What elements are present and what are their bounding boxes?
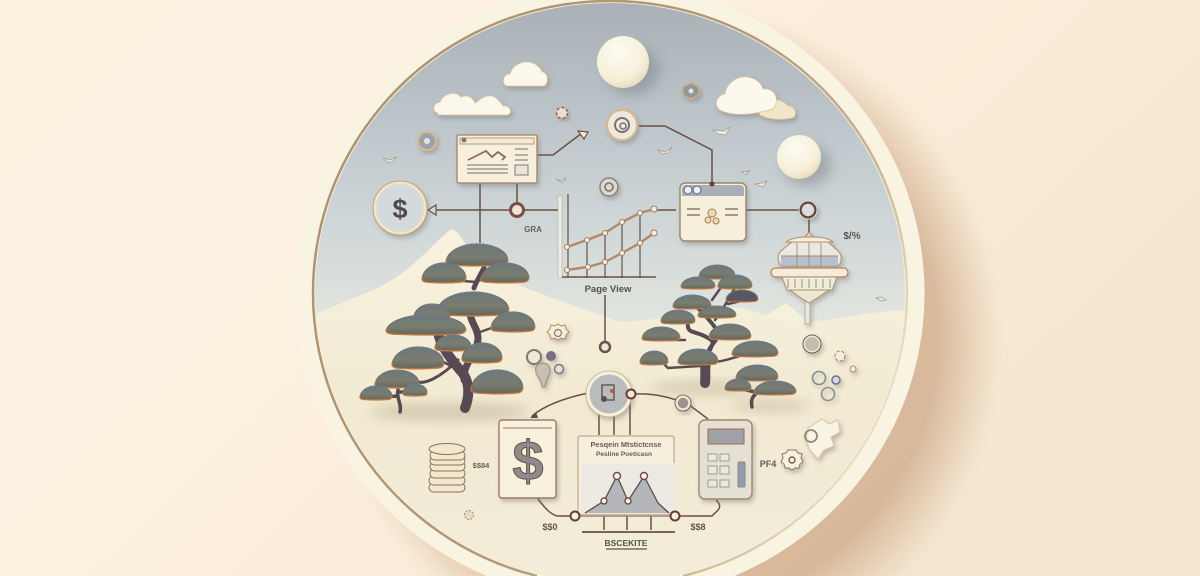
window card: line chart	[457, 135, 537, 183]
arrowhead: top	[578, 131, 588, 139]
bonsai: right large	[640, 265, 796, 407]
icon: hexagon badge	[683, 83, 699, 99]
mini icons: right cluster	[803, 335, 856, 400]
label: coin stack: $$84	[473, 461, 490, 470]
disc landscape	[300, 0, 920, 576]
birds	[383, 127, 886, 301]
sphere: right	[777, 135, 831, 186]
circular frame	[296, 0, 925, 576]
node: upper left	[510, 204, 524, 216]
trunk	[382, 268, 505, 412]
label: left lower: $$0	[542, 522, 558, 532]
label: axis caption: BSCEKITE	[605, 538, 648, 548]
label: small code: GRA	[524, 225, 542, 234]
label: percent: $/%	[843, 231, 861, 242]
cloud: small	[503, 62, 547, 86]
bonsai: left large	[360, 244, 535, 412]
connector: down from chart	[604, 295, 606, 341]
arrowhead: to dollar	[428, 205, 436, 215]
node: chart right	[670, 512, 680, 520]
node: hub right	[626, 390, 636, 398]
node: page view	[600, 342, 610, 352]
icon: dollar coin circle: $	[392, 194, 408, 224]
label: right lower: $$8	[690, 522, 706, 532]
window card: browser	[680, 182, 746, 241]
arcs and connectors: lower	[532, 393, 720, 532]
icon: dollar coin circle	[373, 181, 427, 235]
icon: small badge top	[556, 108, 568, 118]
chart card: distribution	[578, 436, 675, 516]
icon: small flower	[464, 510, 474, 520]
node: right	[799, 201, 817, 219]
node: arc	[675, 395, 691, 411]
arrowhead: to dollar card	[530, 412, 538, 418]
node: chart left	[570, 512, 580, 520]
sky	[315, 3, 905, 322]
distant mountains	[766, 303, 804, 322]
icon: dollar card	[499, 420, 556, 498]
icon: coin stack	[429, 444, 465, 492]
card subtitle: Pesline Poeticasn	[596, 451, 652, 458]
icon: hub circle	[586, 371, 632, 417]
ground	[316, 229, 906, 576]
icon: small badge left	[418, 132, 436, 150]
card title: Pesqein Mtstictcnse	[590, 440, 662, 449]
trunk	[660, 286, 778, 407]
connector lines: upper	[431, 126, 809, 243]
ground shadows	[370, 381, 810, 421]
icon: observatory tower	[771, 232, 848, 324]
line chart: page view	[558, 194, 657, 278]
label: calculator: PF4	[760, 459, 776, 469]
icon: swirl coin	[607, 110, 637, 140]
chart label: Page View	[585, 284, 632, 295]
mini icons: left cluster	[527, 324, 569, 387]
sphere: top	[597, 36, 660, 95]
cloud: left	[434, 93, 510, 115]
icon: small gear	[600, 178, 618, 196]
cloud: right	[716, 77, 795, 119]
foliage	[360, 244, 535, 400]
icon: dollar card: $	[512, 429, 544, 492]
foliage	[640, 265, 796, 395]
infographic scene	[312, 0, 1200, 576]
icon: gears	[781, 419, 840, 470]
icon: calculator	[699, 420, 752, 499]
